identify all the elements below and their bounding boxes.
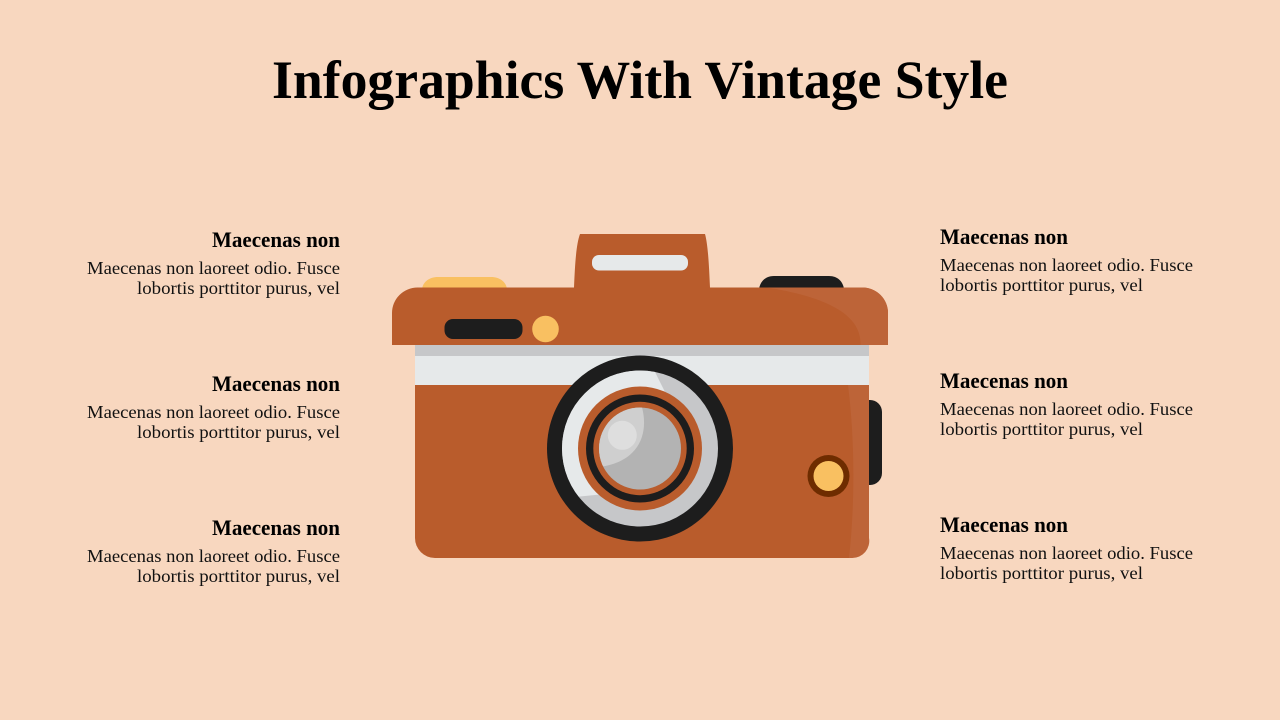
lens silver ring — [562, 370, 718, 526]
lens — [540, 356, 733, 542]
knob — [808, 455, 850, 497]
lens black ring — [586, 394, 694, 502]
body shade — [848, 385, 869, 558]
text block: left 3: Maecenas non laoreet odio. Fusce — [87, 546, 340, 566]
icon: yellow shutter button — [422, 277, 507, 289]
title: Infographics With Vintage Style — [272, 50, 1008, 110]
text block: left 3: lobortis porttitor purus, vel — [137, 566, 340, 586]
lens orange ring — [578, 386, 702, 510]
text block: left 3: Maecenas non — [212, 515, 340, 540]
camera illustration — [392, 234, 888, 558]
top plate shade — [767, 288, 888, 345]
text block: right 1: Maecenas non laoreet odio. Fusce — [940, 255, 1193, 275]
text block: left 3 — [87, 515, 340, 586]
silver band — [415, 345, 869, 385]
text block: left 2 — [87, 371, 340, 442]
text block: left 1: Maecenas non laoreet odio. Fusce — [87, 258, 340, 278]
text block: left 2: lobortis porttitor purus, vel — [137, 422, 340, 442]
lens inner orange ring — [593, 402, 687, 495]
text block: right 3: Maecenas non — [940, 512, 1068, 537]
text block: right 2 — [940, 368, 1193, 439]
lens glass — [599, 408, 681, 490]
text block: right 3: lobortis porttitor purus, vel — [940, 563, 1143, 583]
lens ring highlight — [562, 370, 665, 497]
lens outer ring — [547, 356, 733, 542]
icon: black dial — [759, 276, 844, 289]
yellow dot — [532, 316, 559, 342]
icon: side grip — [865, 400, 882, 485]
text block: left 1: Maecenas non — [212, 227, 340, 252]
text block: left 2: Maecenas non — [212, 371, 340, 396]
text block: right 3 — [940, 512, 1193, 583]
text block: left 1: lobortis porttitor purus, vel — [137, 278, 340, 298]
viewfinder bar — [592, 255, 688, 270]
text block: left 2: Maecenas non laoreet odio. Fusce — [87, 402, 340, 422]
text block: right 1: Maecenas non — [940, 224, 1068, 249]
black slot — [444, 319, 522, 339]
text block: right 1 — [940, 224, 1193, 295]
text block: right 2: lobortis porttitor purus, vel — [940, 419, 1143, 439]
text block: right 3: Maecenas non laoreet odio. Fusce — [940, 543, 1193, 563]
top plate — [392, 234, 888, 345]
glass glint — [608, 421, 637, 450]
text block: right 2: Maecenas non laoreet odio. Fusce — [940, 399, 1193, 419]
text block: right 2: Maecenas non — [940, 368, 1068, 393]
text block: left 1 — [87, 227, 340, 298]
camera body — [415, 345, 869, 558]
text block: right 1: lobortis porttitor purus, vel — [940, 275, 1143, 295]
glass highlight — [599, 408, 644, 466]
